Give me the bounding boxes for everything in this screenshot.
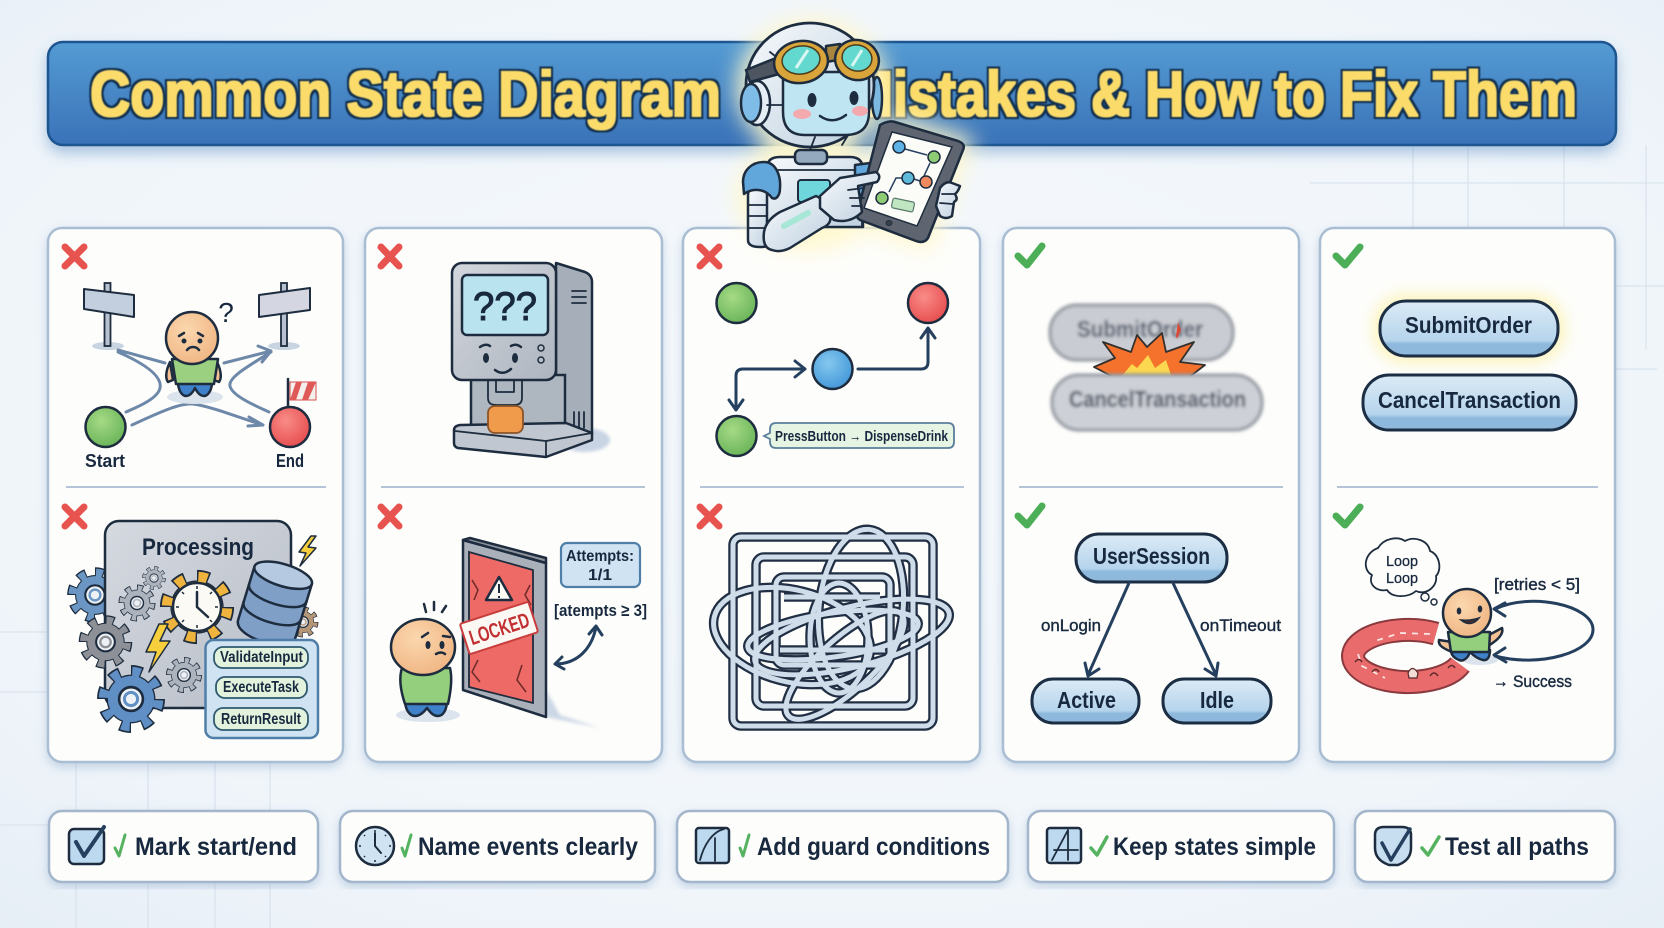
title banner	[48, 42, 1616, 145]
state pill: CancelTransaction: CancelTransaction	[1378, 387, 1561, 413]
icon: red cross 1	[65, 247, 84, 266]
illustration: no start or end state	[84, 283, 316, 471]
state: red top-right	[908, 283, 948, 323]
title text	[90, 58, 1577, 130]
state pill: Active	[1032, 679, 1139, 723]
transition label	[764, 423, 954, 448]
callout: attempts: Attempts:	[566, 548, 634, 565]
state pill: SubmitOrder: SubmitOrder	[1405, 312, 1532, 338]
orange cup	[488, 406, 523, 433]
guard label: [retries < 5]	[1494, 575, 1580, 594]
illustration: confused vending machine	[452, 263, 610, 457]
illustration: blurred overlapping states	[1050, 305, 1262, 430]
tip pill 4: Keep states simple	[1113, 833, 1316, 861]
tip pill 2	[340, 811, 655, 882]
state pill: Idle	[1163, 679, 1271, 723]
thought cloud: Loop	[1386, 571, 1418, 587]
state: start node	[85, 407, 126, 471]
tip pill 3	[677, 811, 1008, 882]
state: green top-left	[716, 283, 756, 323]
icon: lightning corner	[299, 536, 316, 566]
gear: large blue	[105, 673, 157, 725]
arrow: two-way elbow	[729, 361, 805, 410]
tip pill 3: Add guard conditions	[757, 833, 990, 861]
activity: ValidateInput: ValidateInput	[220, 649, 303, 666]
state pill: UserSession: UserSession	[1093, 543, 1210, 569]
icon: green check 4	[1336, 507, 1360, 525]
panel: card 3	[683, 228, 980, 762]
locked sign	[460, 602, 538, 654]
panel: card 2	[365, 228, 662, 762]
guard label: [atempts ≥ 3]	[554, 601, 647, 620]
processing panel: Processing	[142, 534, 254, 561]
state pill: Active: Active	[1057, 687, 1116, 713]
body	[743, 150, 882, 247]
icon: explosion	[1094, 322, 1205, 378]
title text: Common State Diagram	[90, 58, 721, 130]
tip pill 5	[1355, 811, 1615, 882]
illustration: disconnected state flow	[716, 283, 954, 456]
state: green bottom-left	[716, 416, 756, 456]
callout: attempts: 1/1	[588, 567, 612, 584]
icon: tick	[1091, 837, 1107, 855]
label: onLogin: onLogin	[1041, 616, 1101, 635]
gear: brown behind panel	[291, 610, 315, 634]
thought cloud	[1366, 538, 1439, 605]
icon: green check 2	[1336, 247, 1360, 265]
locked sign: LOCKED	[466, 609, 532, 650]
state pill: UserSession	[1076, 534, 1227, 582]
illustration: overloaded processing state	[73, 521, 318, 738]
character: confused person	[166, 297, 234, 404]
state pill: SubmitOrder	[1380, 301, 1558, 356]
arrow: retry loop	[1494, 601, 1593, 662]
illustration: tangled state graph	[703, 525, 956, 735]
icon: guard box	[696, 828, 729, 863]
arrow: onTimeout	[1173, 583, 1218, 676]
icon: clock gear	[168, 578, 226, 636]
arm and hands	[764, 172, 960, 251]
illustration: locked out dead end	[391, 538, 647, 728]
gears: small grey	[85, 569, 198, 689]
icon: clock	[356, 827, 394, 865]
illustration: guarded retry loop	[1353, 538, 1593, 691]
arrow: blue to red	[858, 328, 935, 369]
robot mascot	[736, 18, 975, 252]
icon: tick	[115, 835, 125, 856]
state: end node with flag	[270, 379, 316, 471]
state: start node: Start	[85, 451, 125, 471]
machine screen	[462, 275, 548, 335]
icon: green check 3	[1018, 506, 1042, 525]
tip pill 1	[49, 811, 318, 882]
state: blue middle	[812, 349, 852, 389]
tip pill 1: Mark start/end	[135, 833, 297, 861]
illustration: hierarchical state	[1032, 534, 1281, 723]
character: happy person	[1439, 589, 1502, 665]
activity list	[206, 640, 318, 738]
character: puzzled person	[391, 602, 460, 722]
activity: ExecuteTask: ExecuteTask	[223, 679, 299, 696]
icon: simple box	[1047, 828, 1081, 863]
tip pill 4	[1028, 811, 1334, 882]
racetrack loop	[1353, 630, 1460, 682]
illustration: clean state names	[1363, 293, 1576, 430]
icon: tick	[740, 835, 749, 856]
arrow: guard to door	[555, 626, 602, 669]
tip pill 2: Name events clearly	[418, 833, 638, 861]
icon: red cross 2	[381, 247, 399, 266]
arrows: tangled paths	[118, 346, 271, 426]
icon: red cross 4	[65, 507, 84, 526]
activity: ReturnResult: ReturnResult	[221, 711, 301, 728]
illustration: blurred overlapping states: CancelTransaction	[1069, 386, 1246, 412]
state pill: CancelTransaction	[1363, 375, 1576, 430]
state pill: Idle: Idle	[1200, 687, 1234, 713]
thought cloud: Loop	[1386, 554, 1418, 570]
icon: signpost left	[84, 283, 134, 350]
icon: red cross 3	[700, 247, 719, 266]
icon: checkbox	[69, 827, 104, 864]
panel: card 5	[1320, 228, 1615, 762]
goggles	[746, 35, 883, 87]
icon: signpost right	[259, 283, 310, 350]
machine screen: ???	[473, 285, 537, 329]
transition label: PressButton → DispenseDrink	[775, 428, 949, 445]
tip pill 5: Test all paths	[1445, 833, 1589, 861]
gear: blue behind panel	[73, 573, 117, 617]
icon: lightning center	[146, 624, 170, 672]
character: confused person: ?	[218, 297, 234, 328]
icon: tick	[402, 835, 411, 856]
success label: → Success	[1493, 672, 1572, 691]
callout: attempts	[561, 543, 640, 587]
tablet	[856, 121, 964, 242]
door	[463, 538, 546, 717]
icon: green check 1	[1018, 246, 1042, 265]
arrow: onLogin	[1085, 583, 1129, 676]
glow	[736, 18, 975, 252]
icon: red cross 5	[381, 507, 399, 526]
panel: card 1	[48, 228, 343, 762]
illustration: blurred overlapping states: SubmitOrder	[1077, 316, 1203, 342]
head	[741, 23, 882, 150]
icon: tick	[1422, 837, 1439, 855]
icon: database	[234, 556, 315, 650]
processing panel	[105, 521, 291, 708]
panel: card 4	[1003, 228, 1299, 762]
label: onTimeout: onTimeout	[1200, 616, 1281, 635]
icon: shield check	[1375, 827, 1411, 865]
state: end node with flag: End	[276, 451, 304, 471]
icon: red cross 6	[700, 507, 719, 526]
